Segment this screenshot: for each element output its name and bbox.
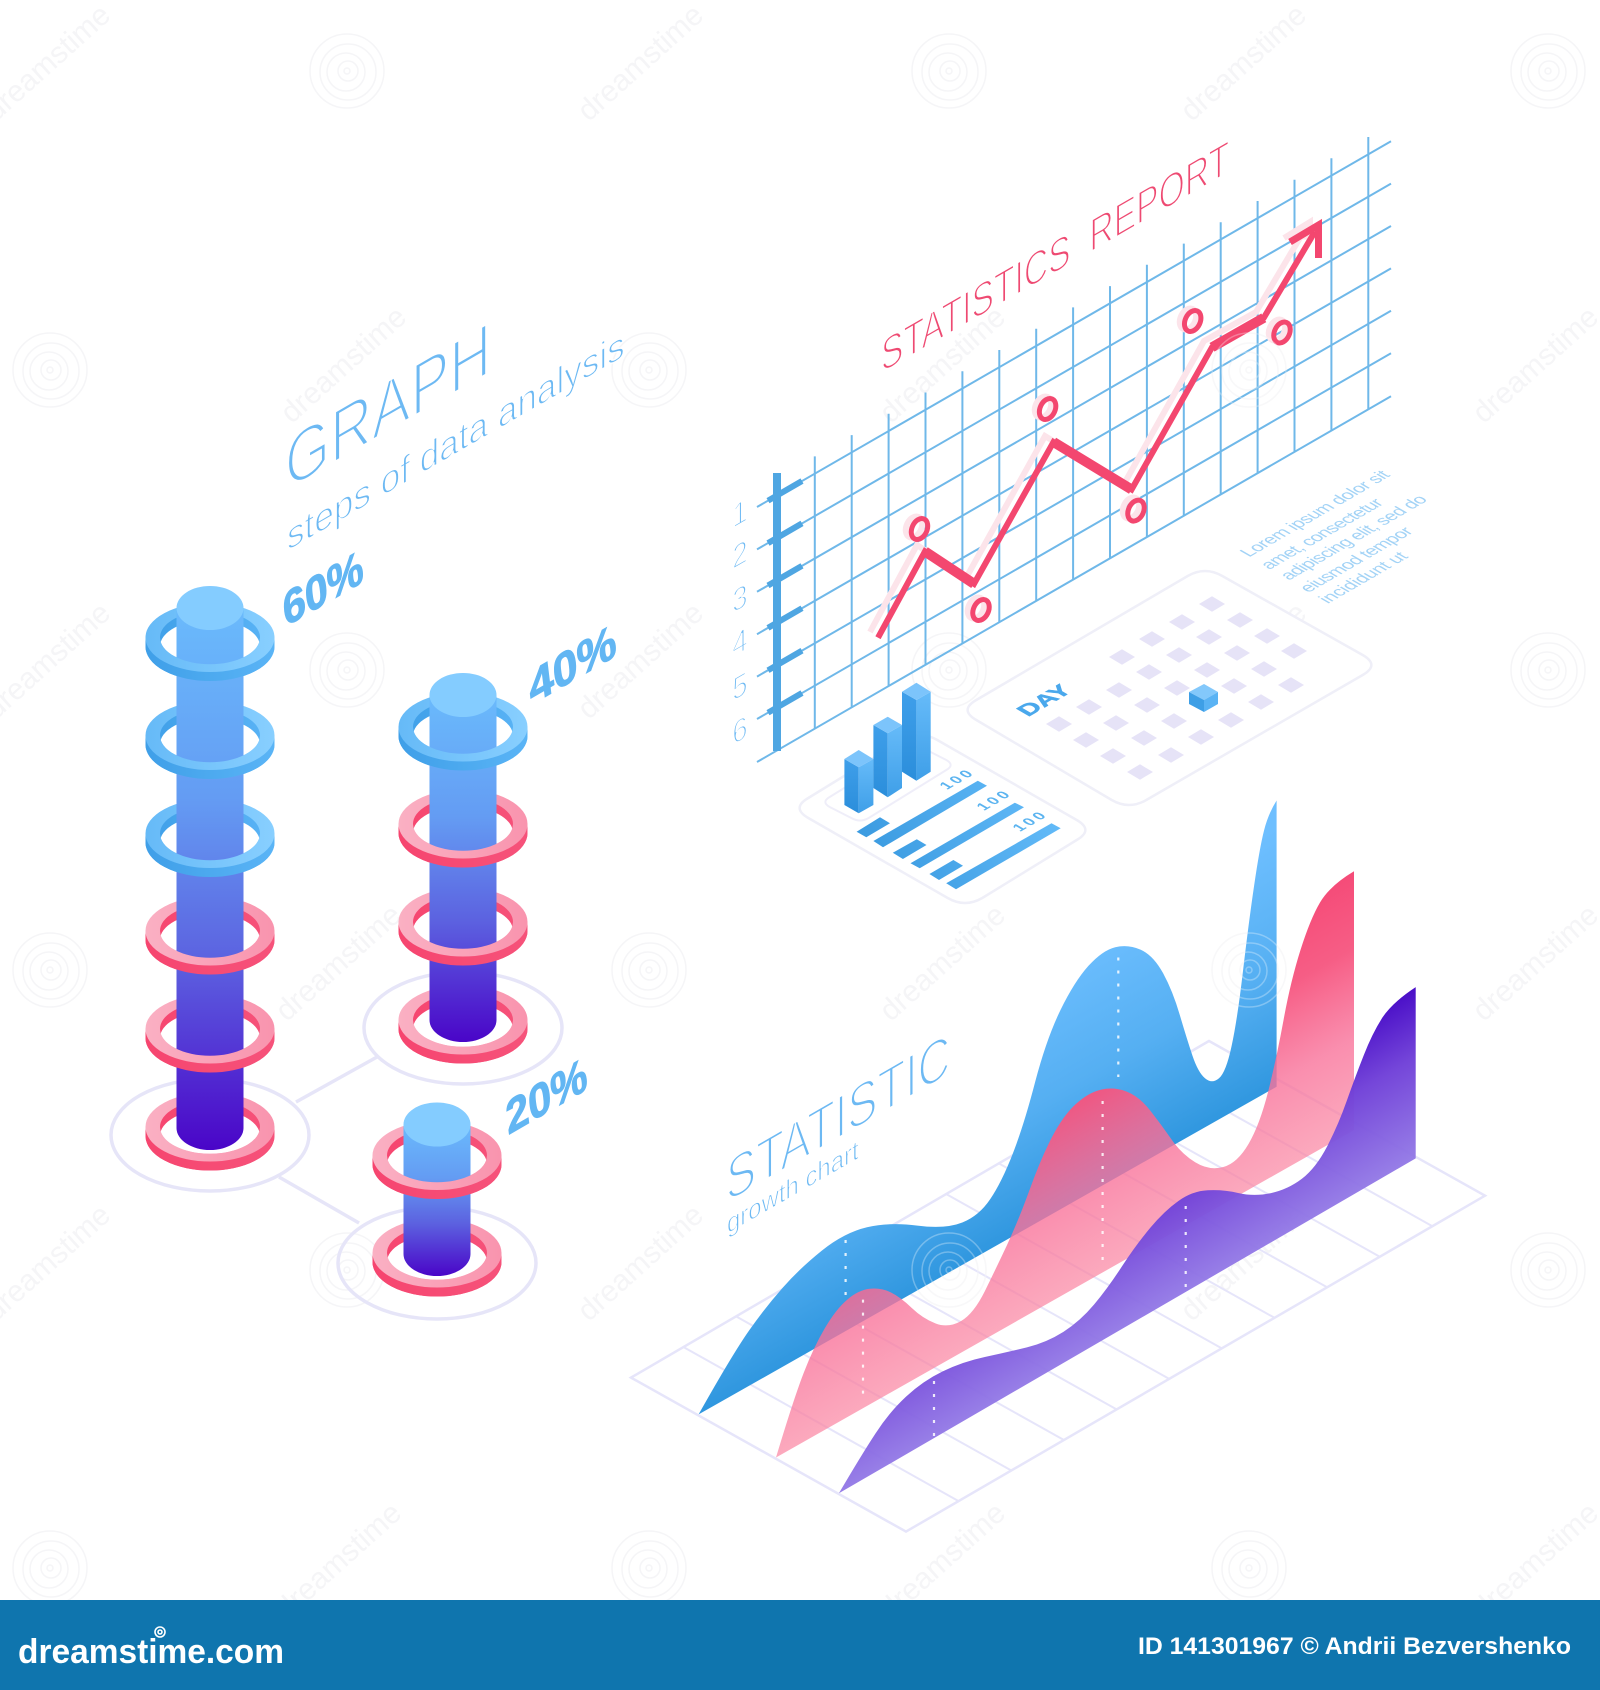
watermark overlay on charts: [912, 333, 1286, 1307]
watermark pattern: dreamstime: [269, 898, 408, 1028]
watermark pattern: dreamstime: [269, 1496, 408, 1626]
flat bars: [857, 781, 1061, 889]
watermark pattern: dreamstime: [873, 1496, 1012, 1626]
y axis: [768, 473, 802, 751]
watermark pattern: dreamstime: [571, 1198, 710, 1328]
title: STATISTIC: STATISTIC: [726, 1019, 950, 1216]
subtitle: steps of data analysis: steps of data analysis: [287, 323, 625, 560]
text block: lorem ipsum: incididunt ut: [1314, 549, 1413, 606]
y axis numbers: 5: [732, 664, 748, 708]
subtitle: growth chart: growth chart: [727, 1134, 859, 1240]
connector lines between bases: [279, 1057, 377, 1223]
watermark pattern: dreamstime: [274, 300, 413, 430]
flat bar values: 100: [973, 789, 1014, 813]
area chart: purple: [839, 987, 1416, 1493]
text block: lorem ipsum: eiusmod tempor: [1295, 524, 1418, 595]
label: 20%: 20%: [503, 1047, 590, 1145]
panel: line chart on wall grid: [732, 137, 1391, 762]
footer banner: [0, 1600, 1600, 1690]
area chart: blue: [699, 800, 1277, 1414]
panel: bar card: [800, 683, 1085, 903]
watermark pattern: dreamstime: [873, 300, 1012, 430]
watermark pattern: dreamstime: [1174, 596, 1313, 726]
3d bar: medium: [873, 717, 902, 797]
area chart: pink: [776, 871, 1354, 1458]
red trend line with arrow: [878, 225, 1318, 638]
icon: selected day cube: [1189, 684, 1218, 712]
watermark pattern: dreamstime: [873, 898, 1012, 1028]
label: DAY: DAY: [1011, 681, 1078, 720]
label: 40%: 40%: [526, 613, 619, 715]
pale line shadow: [870, 222, 1310, 632]
calendar day cells: [1046, 596, 1307, 780]
image credit: ID 141301967 © Andrii Bezvershenko: [1138, 1633, 1571, 1660]
flat bar values: [936, 768, 1050, 834]
pillar: 60 percent: [111, 586, 309, 1191]
watermark pattern: dreamstime: [571, 0, 710, 128]
flat bar values: 100: [1009, 810, 1050, 834]
logo text: dreamstime.com: [18, 1633, 284, 1671]
watermark pattern: dreamstime: [571, 596, 710, 726]
text block: lorem ipsum: Lorem ipsum dolor sit: [1235, 467, 1394, 560]
3d bar: tall: [902, 683, 931, 781]
watermark pattern: dreamstime: [1174, 0, 1313, 128]
title: GRAPH: GRAPH: [285, 305, 491, 507]
y axis numbers: 6: [732, 708, 748, 752]
y axis numbers: 1: [732, 491, 748, 535]
3d bar: small: [844, 750, 873, 813]
flat bar values: 100: [936, 768, 977, 792]
text block: lorem ipsum: amet, consectetur: [1256, 495, 1388, 572]
y axis numbers: 4: [732, 620, 748, 664]
y axis numbers: 2: [732, 532, 748, 576]
floor grid: [631, 1041, 1485, 1532]
text block: lorem ipsum: [1235, 467, 1432, 606]
panel: DAY calendar card: [968, 571, 1371, 805]
pillar: 20 percent: [338, 1102, 536, 1319]
y axis numbers: [732, 491, 748, 752]
data point markers: [908, 308, 1293, 623]
pillar: 40 percent: [364, 673, 562, 1084]
label: 60%: 60%: [280, 539, 366, 637]
text block: lorem ipsum: adipiscing elit, sed do: [1275, 492, 1432, 583]
heading: STATISTICS REPORT: STATISTICS REPORT: [881, 130, 1229, 383]
watermark pattern: dreamstime: [1174, 1198, 1313, 1328]
y axis numbers: 3: [732, 576, 748, 620]
icon: logo spiral: [155, 1627, 165, 1637]
